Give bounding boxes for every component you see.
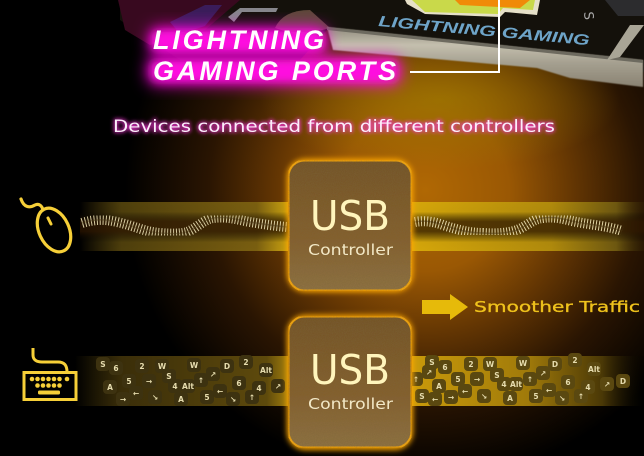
callout leader line [410, 0, 499, 72]
keycaps right: Alt [510, 380, 522, 389]
keycaps right: 6 [565, 378, 571, 387]
icon: mouse [21, 199, 77, 257]
keycaps left: ↗ [275, 382, 281, 391]
graphics card photo: S [580, 11, 596, 21]
title [153, 25, 396, 86]
keycaps left: 5 [204, 393, 210, 402]
keycaps left: A [107, 383, 113, 392]
keycaps left: S [166, 372, 172, 381]
board logo text: LIGHTNING GAMING [378, 13, 591, 49]
keycaps right: ↘ [559, 394, 565, 403]
keycaps right: ↘ [481, 392, 487, 401]
chart: tangled cable traffic left [82, 217, 287, 234]
panel: USB controller top: USB [310, 192, 390, 240]
keycaps right: 4 [585, 383, 591, 392]
panel: USB controller bottom [287, 315, 413, 450]
keycaps left: ↗ [210, 370, 216, 379]
keycaps left: 6 [113, 364, 119, 373]
keycaps left: ← [133, 389, 139, 398]
keycaps right: Alt [588, 365, 600, 374]
keycaps right: W [519, 359, 528, 368]
keycaps right: → [448, 393, 454, 402]
panel: USB controller top: Controller [308, 241, 394, 259]
keycaps left: W [190, 361, 199, 370]
keycaps right: 5 [455, 375, 461, 384]
keycaps right: ↗ [604, 380, 610, 389]
keycaps left: 4 [172, 382, 178, 391]
keycaps left: A [178, 395, 184, 404]
keycaps left: 6 [236, 379, 242, 388]
label: smoother traffic: Smoother Traffic [474, 298, 640, 316]
keycaps right: ↑ [527, 375, 533, 384]
keycaps right: A [507, 394, 513, 403]
keycaps left: → [120, 395, 126, 404]
keycaps right: ← [462, 387, 468, 396]
keycaps right: 4 [501, 380, 507, 389]
keycaps left: Alt [182, 382, 194, 391]
keycaps left: → [146, 377, 152, 386]
keycaps right: W [486, 360, 495, 369]
keycaps right: ↗ [540, 369, 546, 378]
keycaps right: ↗ [426, 368, 432, 377]
keycaps right: D [552, 360, 558, 369]
keycaps left: 5 [126, 377, 132, 386]
keycaps left: ↘ [230, 395, 236, 404]
keycaps left: ↘ [152, 393, 158, 402]
arrow: smoother traffic [422, 294, 468, 320]
keycaps left: W [158, 362, 167, 371]
keycaps right: A [436, 382, 442, 391]
keycaps left: 2 [139, 362, 145, 371]
keycaps left: D [224, 362, 230, 371]
keycaps left: ↑ [249, 393, 255, 402]
keycaps right [409, 353, 630, 406]
keycaps right: 2 [468, 360, 474, 369]
panel: USB controller bottom: USB [310, 346, 390, 394]
keycaps left: Alt [260, 366, 272, 375]
keycaps right: ← [432, 395, 438, 404]
subtitle: Devices connected from different controllers [113, 117, 555, 137]
keycaps left: ← [217, 387, 223, 396]
icon: golden heatsink arrow [405, 0, 540, 17]
keycaps right: ↑ [578, 392, 584, 401]
icon: keyboard [24, 348, 76, 400]
keycaps left: 4 [256, 384, 262, 393]
keycaps right: D [620, 377, 626, 386]
keycaps right: S [494, 371, 500, 380]
graphics card photo [118, 0, 644, 87]
keycaps right: 6 [442, 363, 448, 372]
title: GAMING PORTS [153, 56, 396, 86]
keycaps right: 5 [533, 392, 539, 401]
keycaps left: 2 [243, 358, 249, 367]
panel: USB controller top [287, 159, 413, 292]
title glow [148, 28, 400, 84]
band: mouse data lane [80, 202, 644, 251]
keycaps right: S [419, 392, 425, 401]
title: LIGHTNING [153, 25, 324, 55]
keycaps left: S [100, 360, 106, 369]
keycaps left: ↑ [198, 376, 204, 385]
keycaps right: ↑ [413, 375, 419, 384]
keycaps right: → [474, 375, 480, 384]
keycaps right: 2 [572, 356, 578, 365]
chart: tangled cable traffic right [415, 217, 622, 233]
panel: USB controller bottom: Controller [308, 395, 394, 413]
keycaps right: ← [546, 386, 552, 395]
keycaps right: S [429, 358, 435, 367]
subtitle: Devices connected from different controllers [113, 117, 555, 137]
band: keyboard data lane [75, 356, 644, 406]
keycaps left [96, 355, 285, 406]
